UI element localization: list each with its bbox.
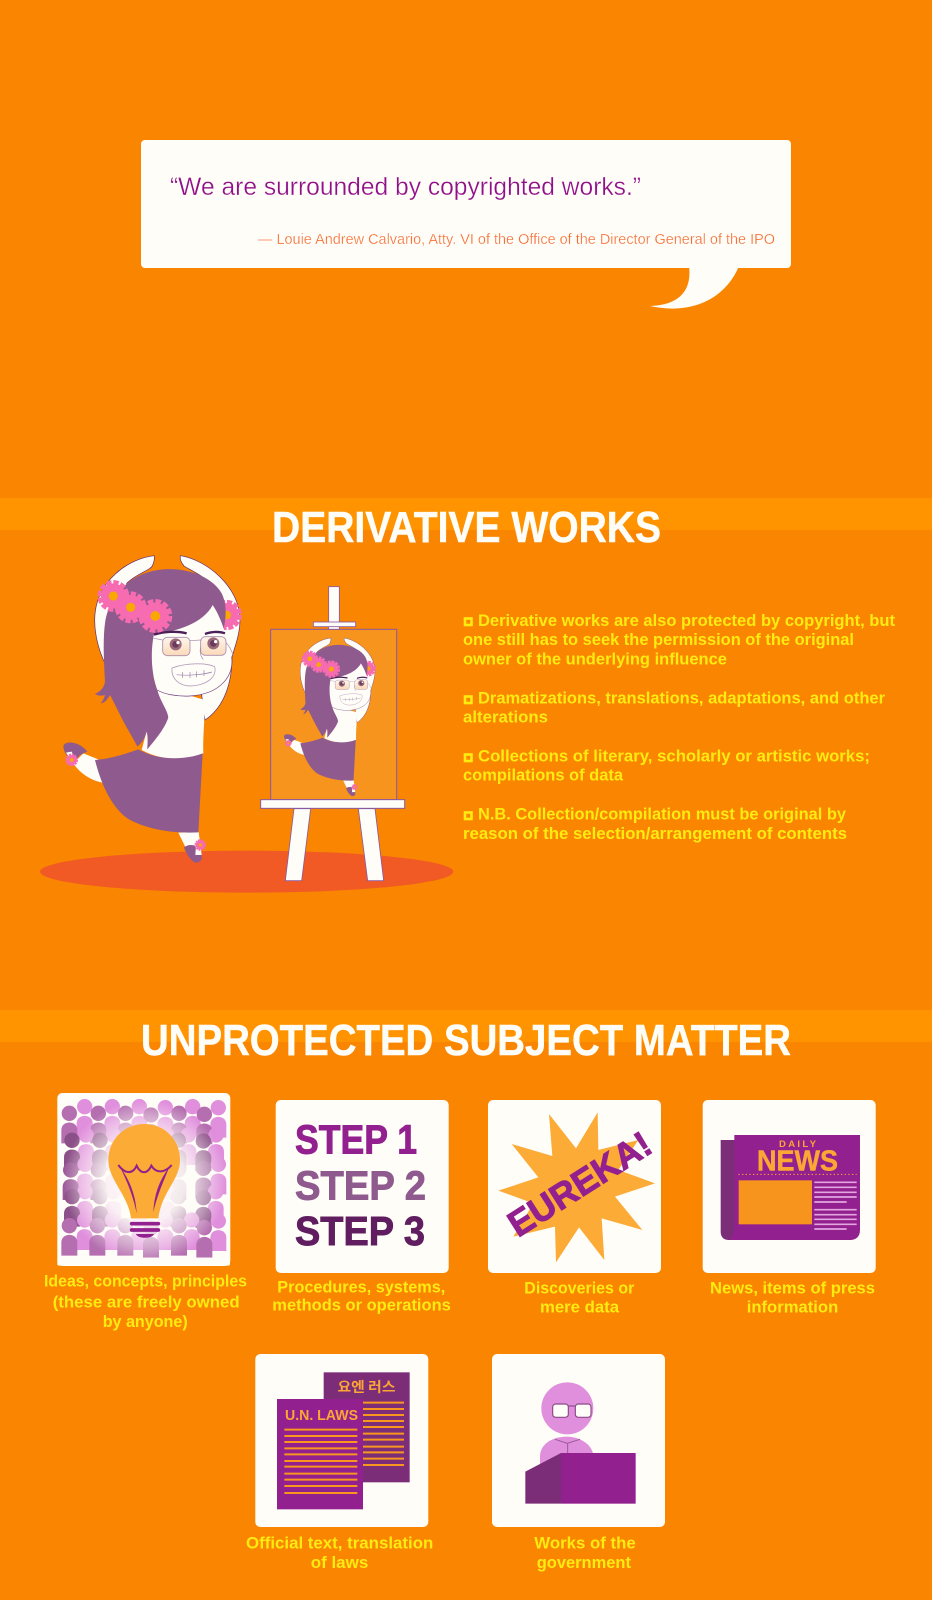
panel: ideas [44, 1093, 247, 1331]
text block: derivative works bullets [463, 611, 895, 843]
panel: discoveries [488, 1100, 661, 1317]
caption: news [710, 1278, 875, 1317]
icon: newspaper: DAILY [779, 1139, 817, 1150]
caption: news: information [747, 1298, 838, 1317]
illustration: ballerina and painting on easel [40, 556, 453, 893]
caption: discoveries: mere data [540, 1298, 620, 1317]
easel [261, 587, 405, 881]
icon: steps: STEP 1 [295, 1116, 417, 1162]
caption: government: Works of the [534, 1533, 636, 1552]
painted character on canvas [284, 638, 375, 796]
icon: law documents: 요엔 러스 [338, 1377, 396, 1397]
panel: government [492, 1354, 665, 1572]
icon: steps: STEP 2 [295, 1162, 426, 1208]
caption: ideas: (these are freely owned [53, 1292, 240, 1312]
icon: official at podium [525, 1382, 636, 1504]
text block: derivative works bullets: N.B. Collection/compilation must be original by [478, 804, 847, 824]
text block: derivative works bullets: one still has to seek the permission of the original [463, 630, 854, 649]
text block: derivative works bullets: alterations [463, 708, 548, 726]
quote text: “We are surrounded by copyrighted works.” [170, 173, 641, 201]
icon: light bulb over crowd [57, 1093, 230, 1266]
quote speech bubble [141, 140, 791, 309]
caption: official texts: Official text, translation [246, 1533, 433, 1552]
caption: government: government [537, 1553, 631, 1572]
caption: ideas: by anyone) [103, 1312, 188, 1331]
text block: derivative works bullets: Dramatizations, translations, adaptations, and other [478, 688, 885, 708]
icon: eureka starburst: EUREKA! [500, 1123, 659, 1245]
quote attribution: — Louie Andrew Calvario, Atty. VI of the Office of the Director General of the IPO [258, 232, 775, 248]
icon: law documents: U.N. LAWS [285, 1408, 358, 1424]
panel: news [703, 1100, 876, 1317]
caption: ideas [44, 1272, 247, 1331]
panel: procedures [272, 1100, 451, 1315]
text block: derivative works bullets: Derivative works are also protected by copyright, but [478, 611, 895, 630]
icon: steps [295, 1116, 426, 1254]
heading: derivative works: DERIVATIVE WORKS [272, 503, 661, 552]
caption: official texts [246, 1533, 433, 1572]
heading band: unprotected subject matter [0, 1010, 932, 1042]
caption: government [534, 1533, 636, 1572]
icon: law documents [277, 1372, 410, 1509]
icon: newspaper [721, 1135, 860, 1240]
text block: derivative works bullets: Collections of literary, scholarly or artistic works; [478, 746, 870, 766]
text block: derivative works bullets: compilations of data [463, 766, 624, 784]
heading band: derivative works [0, 498, 932, 530]
caption: procedures: methods or operations [272, 1296, 451, 1315]
text block: derivative works bullets: reason of the selection/arrangement of contents [463, 824, 847, 843]
icon: newspaper: NEWS [757, 1146, 838, 1178]
heading: unprotected subject matter: UNPROTECTED SUBJECT MATTER [141, 1016, 791, 1065]
ground shadow [40, 851, 453, 893]
icon: steps: STEP 3 [295, 1208, 425, 1254]
caption: ideas: Ideas, concepts, principles [44, 1272, 247, 1290]
caption: news: News, items of press [710, 1278, 875, 1297]
caption: discoveries: Discoveries or [524, 1278, 635, 1297]
character [63, 556, 240, 863]
caption: procedures [272, 1278, 451, 1315]
caption: official texts: of laws [311, 1553, 368, 1572]
text block: derivative works bullets: owner of the underlying influence [463, 650, 727, 668]
caption: discoveries [524, 1278, 635, 1317]
caption: procedures: Procedures, systems, [277, 1278, 445, 1296]
panel: official texts [246, 1354, 433, 1572]
